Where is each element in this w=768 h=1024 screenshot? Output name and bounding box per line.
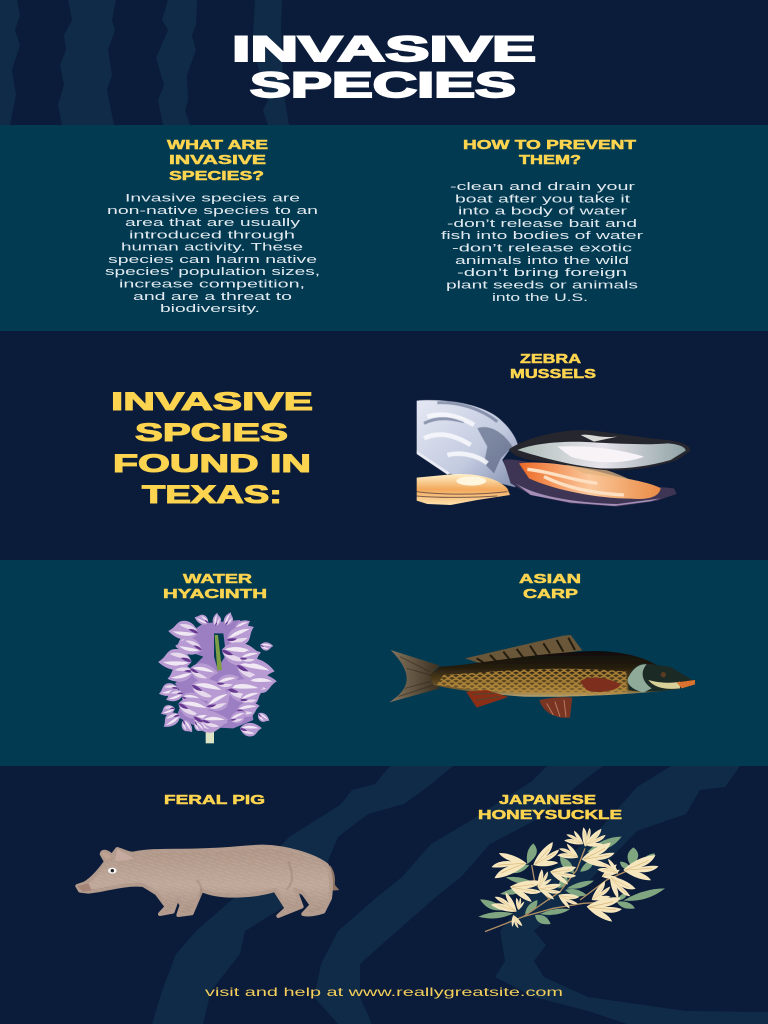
title: SPECIES bbox=[250, 66, 516, 105]
text block: definition: species’ population sizes, bbox=[105, 266, 320, 278]
label: japanese honeysuckle bbox=[478, 793, 622, 822]
icon: zebra mussels bbox=[417, 400, 691, 507]
icon: feral pig bbox=[77, 847, 339, 916]
text block: prevention tips: -don’t bring foreign bbox=[457, 267, 627, 279]
heading: how to prevent them: THEM? bbox=[519, 153, 581, 167]
heading: invasive species found in texas: INVASIVE bbox=[111, 388, 313, 416]
text block: prevention tips: boat after you take it bbox=[455, 193, 631, 205]
heading: invasive species found in texas bbox=[111, 388, 313, 509]
heading: what are invasive species: WHAT ARE bbox=[167, 138, 268, 152]
text block: definition: increase competition, bbox=[119, 278, 305, 290]
text block: definition: introduced through bbox=[129, 229, 295, 241]
text block: prevention tips: fish into bodies of water bbox=[441, 230, 643, 242]
text block: definition bbox=[105, 192, 320, 315]
text block: prevention tips: plant seeds or animals bbox=[446, 280, 639, 292]
text block: prevention tips: animals into the wild bbox=[455, 255, 629, 267]
text block: definition: Invasive species are bbox=[125, 192, 300, 204]
label: japanese honeysuckle: JAPANESE bbox=[499, 793, 596, 807]
text block: definition: biodiversity. bbox=[160, 303, 260, 315]
title bbox=[232, 30, 536, 105]
text block: prevention tips: -clean and drain your bbox=[450, 181, 635, 193]
text block: definition: human activity. These bbox=[121, 242, 303, 254]
heading: invasive species found in texas: FOUND IN bbox=[113, 450, 311, 478]
heading: invasive species found in texas: SPCIES bbox=[135, 419, 288, 447]
text block: prevention tips: into the U.S. bbox=[492, 292, 588, 304]
heading: what are invasive species: INVASIVE bbox=[169, 153, 266, 167]
text block: prevention tips bbox=[441, 181, 643, 304]
bottom wavy stripes bbox=[152, 766, 768, 1024]
label: zebra mussels bbox=[510, 352, 596, 381]
panel: what are invasive species bbox=[105, 138, 320, 315]
heading: how to prevent them: HOW TO PREVENT bbox=[463, 138, 637, 152]
top wavy stripes bbox=[0, 0, 289, 125]
text block: definition: species can harm native bbox=[108, 254, 317, 266]
label: asian carp: ASIAN bbox=[519, 572, 581, 586]
text block: prevention tips: -don’t release exotic bbox=[452, 242, 633, 254]
label: zebra mussels: MUSSELS bbox=[510, 367, 596, 381]
label: water hyacinth: WATER bbox=[183, 572, 252, 586]
text block: definition: and are a threat to bbox=[133, 291, 292, 303]
heading: invasive species found in texas: TEXAS: bbox=[142, 481, 282, 509]
text block: prevention tips: -don’t release bait and bbox=[447, 218, 637, 230]
label: asian carp bbox=[519, 572, 581, 601]
title: INVASIVE bbox=[232, 30, 536, 69]
text block: prevention tips: into a body of water bbox=[458, 206, 627, 218]
text block: definition: non-native species to an bbox=[107, 205, 318, 217]
icon: asian carp bbox=[389, 635, 695, 718]
label: japanese honeysuckle: HONEYSUCKLE bbox=[478, 808, 622, 822]
text block: definition: area that are usually bbox=[125, 217, 301, 229]
heading: what are invasive species: SPECIES? bbox=[169, 169, 264, 183]
heading: what are invasive species bbox=[167, 138, 268, 183]
footer link: visit and help at www.reallygreatsite.com bbox=[205, 986, 563, 999]
heading: how to prevent them bbox=[463, 138, 637, 167]
label: zebra mussels: ZEBRA bbox=[520, 352, 581, 366]
label: water hyacinth bbox=[163, 572, 267, 601]
panel: how to prevent them bbox=[441, 138, 643, 304]
label: asian carp: CARP bbox=[523, 587, 578, 601]
band: definitions and prevention bbox=[0, 125, 768, 331]
band: water species bbox=[0, 560, 768, 766]
icon: water hyacinth bbox=[157, 611, 277, 743]
label: feral pig: FERAL PIG bbox=[164, 793, 265, 807]
label: water hyacinth: HYACINTH bbox=[163, 587, 267, 601]
icon: japanese honeysuckle bbox=[478, 826, 665, 932]
